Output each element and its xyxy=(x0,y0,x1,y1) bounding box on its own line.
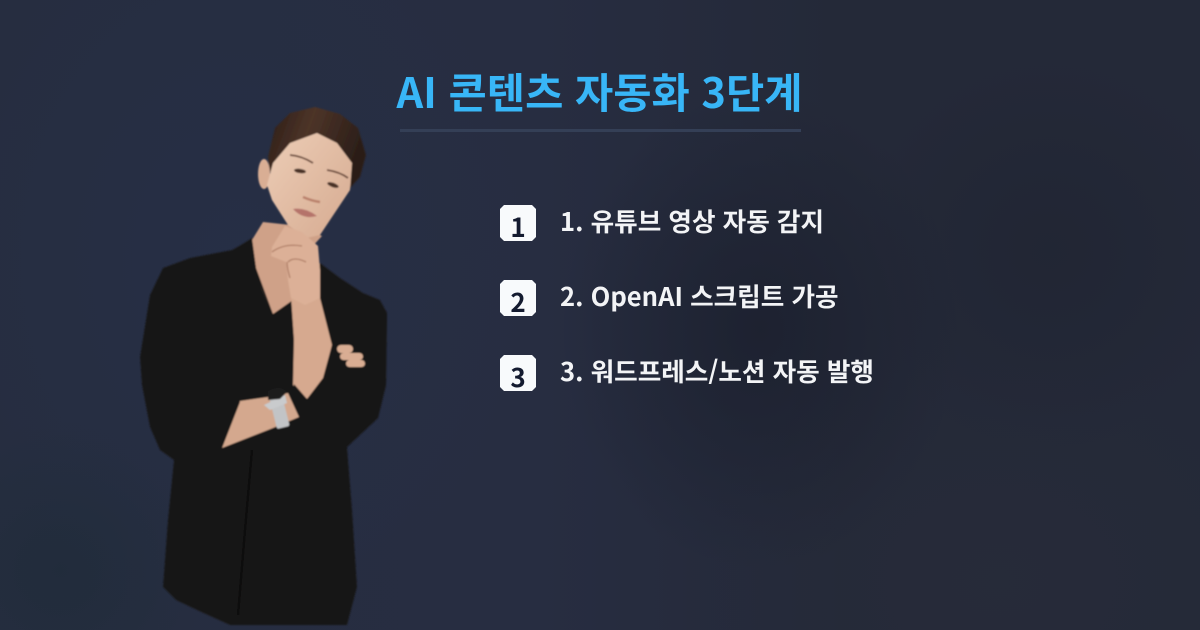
rolled left sleeve xyxy=(150,395,240,458)
step 1 number badge: 1 xyxy=(510,208,526,245)
watch xyxy=(264,388,290,429)
rolled right sleeve xyxy=(294,296,387,447)
fingers on arm xyxy=(337,345,365,367)
step 2 number badge: 2 xyxy=(510,283,526,320)
step 1 text: 1. 유튜브 영상 자동 감지 xyxy=(560,202,824,239)
shirt collar xyxy=(233,238,294,370)
neck and chest xyxy=(252,222,322,314)
step 3 number badge xyxy=(500,355,536,391)
step 3 text: 3. 워드프레스/노션 자동 발행 xyxy=(560,352,874,389)
step 1 number badge xyxy=(500,205,536,241)
raising forearm xyxy=(291,296,332,399)
hair xyxy=(268,107,366,188)
step 2 number badge xyxy=(500,280,536,316)
crossed forearm xyxy=(222,393,299,448)
step 3 number badge: 3 xyxy=(510,358,526,395)
shirt xyxy=(140,237,387,625)
shirt placket xyxy=(238,450,252,615)
nose and lips xyxy=(293,197,320,217)
eyes xyxy=(294,168,339,189)
eyebrows xyxy=(290,155,348,178)
step 2 text: 2. OpenAI 스크립트 가공 xyxy=(560,277,839,314)
title: AI 콘텐츠 자동화 3단계 xyxy=(396,60,802,120)
title underline xyxy=(400,129,801,132)
ear xyxy=(258,159,270,189)
hand at chin xyxy=(271,226,320,305)
face xyxy=(267,133,352,238)
hand finger lines xyxy=(272,245,306,278)
